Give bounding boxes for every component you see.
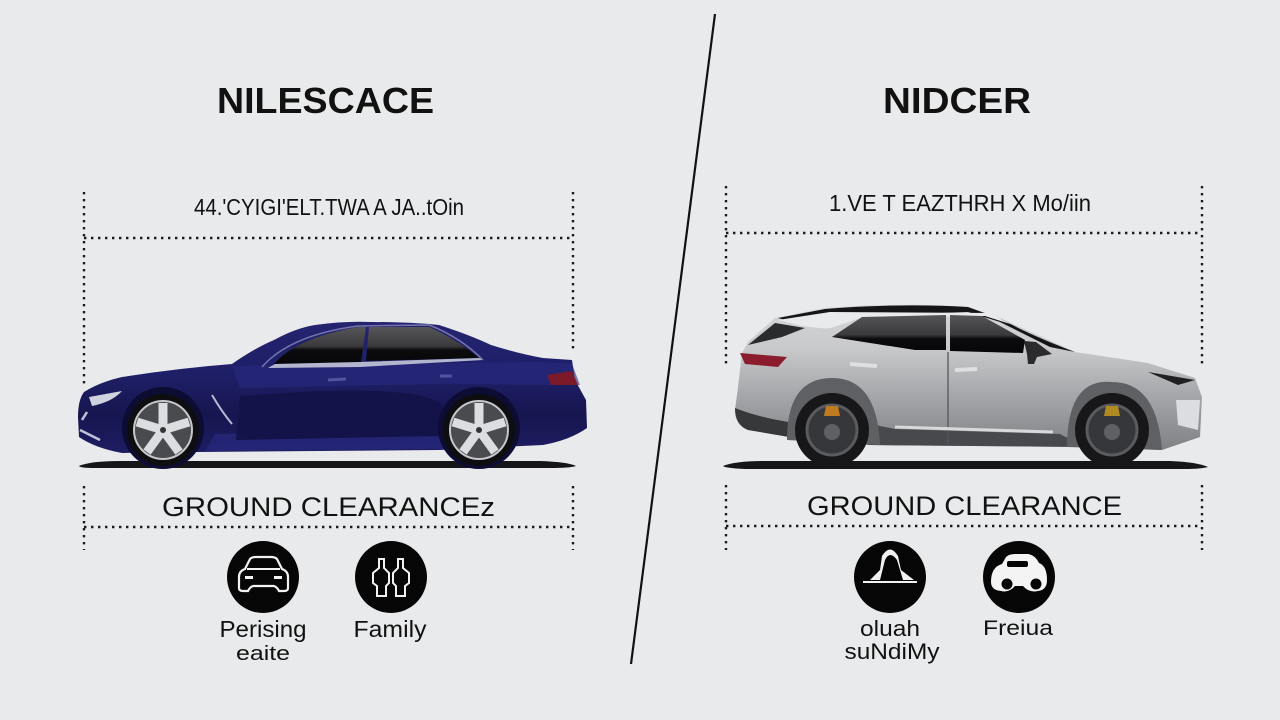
side windows	[274, 327, 479, 364]
wheel arches	[122, 387, 204, 469]
side windows	[832, 315, 1025, 353]
label: Freiua: Freiua	[983, 617, 1053, 640]
dotted dimension frame: upper right	[726, 186, 1202, 365]
label: Perising: Perising	[220, 616, 306, 642]
tail light	[740, 353, 787, 367]
icon: car front	[227, 541, 299, 613]
rear wheel	[443, 394, 515, 466]
label: ground clearance left: GROUND CLEARANCEz	[162, 492, 495, 522]
wheel arches	[787, 378, 880, 445]
dotted dimension frame: lower right	[726, 485, 1202, 550]
ground shadow: SUV	[723, 461, 1208, 469]
label: eaite: eaite	[236, 643, 290, 665]
door handles	[328, 376, 452, 380]
panel: left sedan	[78, 80, 587, 665]
rear wheel	[795, 393, 869, 467]
lower cladding	[735, 408, 795, 438]
dotted dimension frame: lower left	[84, 486, 573, 550]
dimension label: top left: 44.'CYIGI'ELT.TWA A JA..tOin	[194, 194, 464, 220]
car: blue sedan	[78, 322, 587, 469]
icon: two people	[355, 541, 427, 613]
dimension label: top right: 1.VE T EAZTHRH X Mo/iin	[829, 190, 1091, 216]
panel: right SUV	[723, 80, 1208, 664]
front wheel	[127, 394, 199, 466]
mirror	[1024, 341, 1052, 364]
headlight and tail light	[89, 391, 122, 406]
dotted dimension frame: upper left	[84, 192, 573, 388]
icon: mountain terrain	[854, 541, 926, 613]
heading: NIDCER: NIDCER	[883, 80, 1031, 121]
label: ground clearance right: GROUND CLEARANCE	[807, 491, 1122, 521]
front details	[80, 412, 100, 440]
roof and spoiler	[778, 305, 1075, 352]
icon: side-view car	[983, 541, 1055, 613]
label: suNdiMy: suNdiMy	[844, 639, 940, 664]
side strip	[895, 427, 1053, 432]
heading: NILESCACE: NILESCACE	[217, 80, 434, 121]
ground shadow: sedan	[79, 461, 576, 468]
front wheel	[1075, 393, 1149, 467]
door line and handles	[947, 352, 949, 444]
car: silver SUV	[735, 305, 1202, 467]
rear glass	[748, 323, 805, 345]
label: oluah: oluah	[860, 616, 920, 641]
headlight and nose	[1148, 372, 1195, 385]
divider line	[631, 14, 715, 664]
label: Family: Family	[354, 616, 427, 642]
